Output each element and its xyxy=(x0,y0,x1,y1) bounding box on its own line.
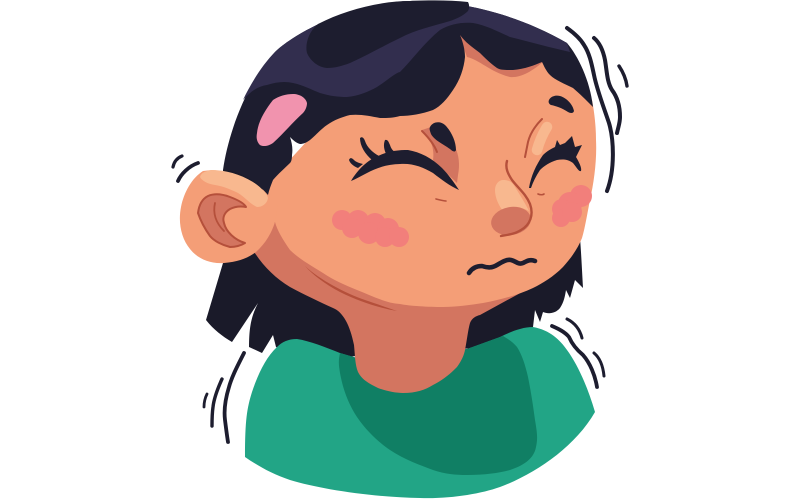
face xyxy=(262,30,596,311)
mouth xyxy=(469,260,535,273)
right eyebrow xyxy=(549,96,574,113)
right cheek crease xyxy=(525,119,542,157)
ear highlight xyxy=(200,170,268,207)
lower eye tick right xyxy=(538,193,544,196)
right cheek highlight xyxy=(537,127,547,150)
eyelash xyxy=(360,137,379,160)
right closed eye xyxy=(529,136,582,188)
front hair xyxy=(223,0,593,195)
ear fold xyxy=(214,203,224,231)
nose line xyxy=(501,161,532,236)
left eyebrow xyxy=(430,122,456,152)
inner ear xyxy=(198,194,246,247)
neck xyxy=(253,200,535,393)
shadow crease xyxy=(422,131,437,152)
shake lines: top right xyxy=(567,28,627,191)
hair highlight xyxy=(243,1,570,100)
shake lines: ear xyxy=(173,156,198,181)
neck crease xyxy=(305,266,397,311)
shirt xyxy=(245,327,595,498)
lower eye tick left xyxy=(436,199,446,201)
hair top patch xyxy=(306,0,469,68)
nose xyxy=(489,161,533,238)
shirt shadow xyxy=(339,336,537,475)
left closed eye xyxy=(349,137,459,190)
shake lines: bottom right xyxy=(552,319,604,387)
right cheek blush xyxy=(552,185,592,227)
shake lines: bottom left xyxy=(204,353,244,442)
hairline shadow xyxy=(458,32,545,77)
back hair xyxy=(206,120,590,360)
left cheek blush xyxy=(332,210,409,247)
hair clip xyxy=(257,94,307,146)
eyelash xyxy=(384,140,395,156)
ear xyxy=(180,170,278,263)
left eye shadow xyxy=(422,127,459,183)
eyelash xyxy=(349,158,363,168)
